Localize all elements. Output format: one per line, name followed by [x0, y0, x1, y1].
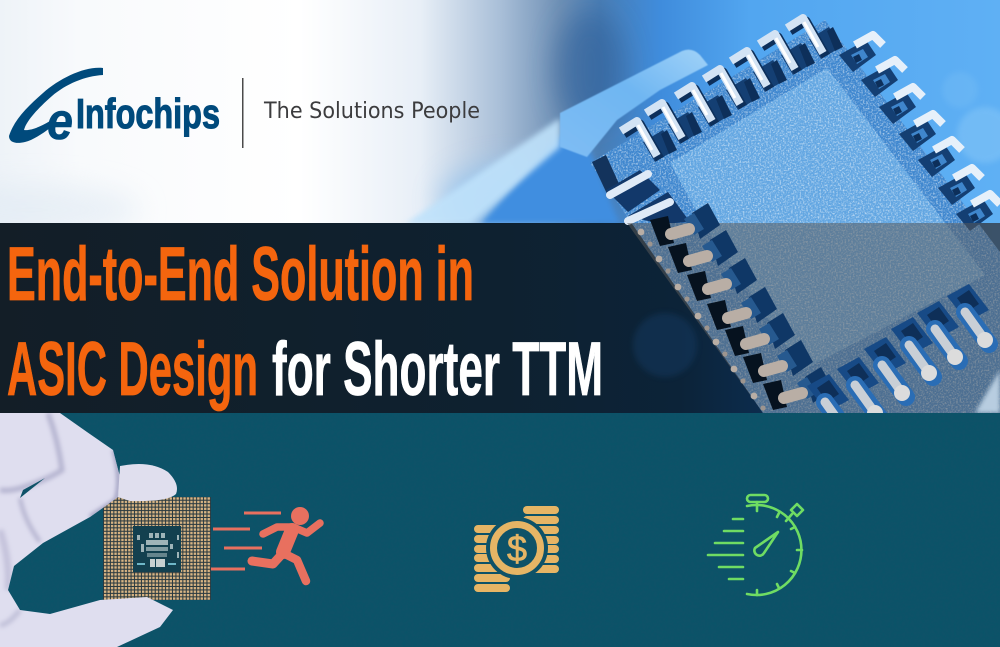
title band backing: [0, 223, 1000, 413]
ticks: [757, 513, 802, 595]
tweezer: [405, 50, 708, 224]
needle: [754, 532, 778, 556]
crown: [747, 495, 768, 502]
band pins, bottom edge: [807, 284, 1000, 413]
runner body: [252, 523, 320, 581]
icon: coins: [474, 506, 559, 592]
tagline: The Solutions People: [263, 99, 480, 124]
speed lines: [708, 519, 743, 579]
left edge upper pins: [606, 170, 690, 224]
chip dark corner: [592, 155, 620, 196]
band pins, left edge: [638, 203, 833, 411]
bokeh lights: [942, 72, 1000, 163]
icon: stopwatch: [708, 495, 803, 595]
title line 2 orange: ASIC Design: [7, 327, 258, 412]
chip plate: [670, 68, 985, 370]
processor die detail: [137, 533, 179, 567]
title line 1: End-to-End Solution in: [7, 232, 474, 317]
logo swoosh: [9, 68, 103, 143]
coin stacks: [474, 506, 559, 592]
logo: eInfochips: [9, 68, 220, 151]
hero background gradient: [0, 0, 1000, 224]
processor: [103, 497, 211, 600]
title line 2 white: for Shorter TTM: [272, 327, 603, 412]
gloved hand holding processor: [0, 413, 211, 647]
hero photo: chip in tweezers: [0, 0, 1000, 438]
chip body: [590, 20, 1000, 413]
title: [7, 232, 603, 412]
chip: [590, 18, 1000, 415]
glove: [0, 413, 173, 647]
gap between fingers: [20, 478, 45, 498]
lower teal panel: [0, 413, 1000, 647]
logo wordmark: Infochips: [76, 90, 220, 137]
processor pads: [103, 497, 211, 600]
processor die area: [133, 526, 181, 572]
coin: [486, 517, 548, 579]
right edge pins: [839, 35, 1000, 231]
chip grain: [590, 20, 1000, 415]
top edge pins: [621, 18, 843, 162]
side button: [786, 504, 803, 521]
icon: running person with speed lines: [211, 507, 320, 581]
speed lines: [211, 513, 281, 569]
logo divider: [242, 78, 244, 148]
glove shading: [0, 413, 119, 625]
translucent band over chip: [627, 223, 1000, 413]
runner head: [291, 507, 309, 525]
dial arc: [747, 505, 801, 595]
logo e: e: [47, 93, 73, 151]
dollar sign: $: [507, 528, 527, 569]
fingertip: [118, 464, 177, 501]
